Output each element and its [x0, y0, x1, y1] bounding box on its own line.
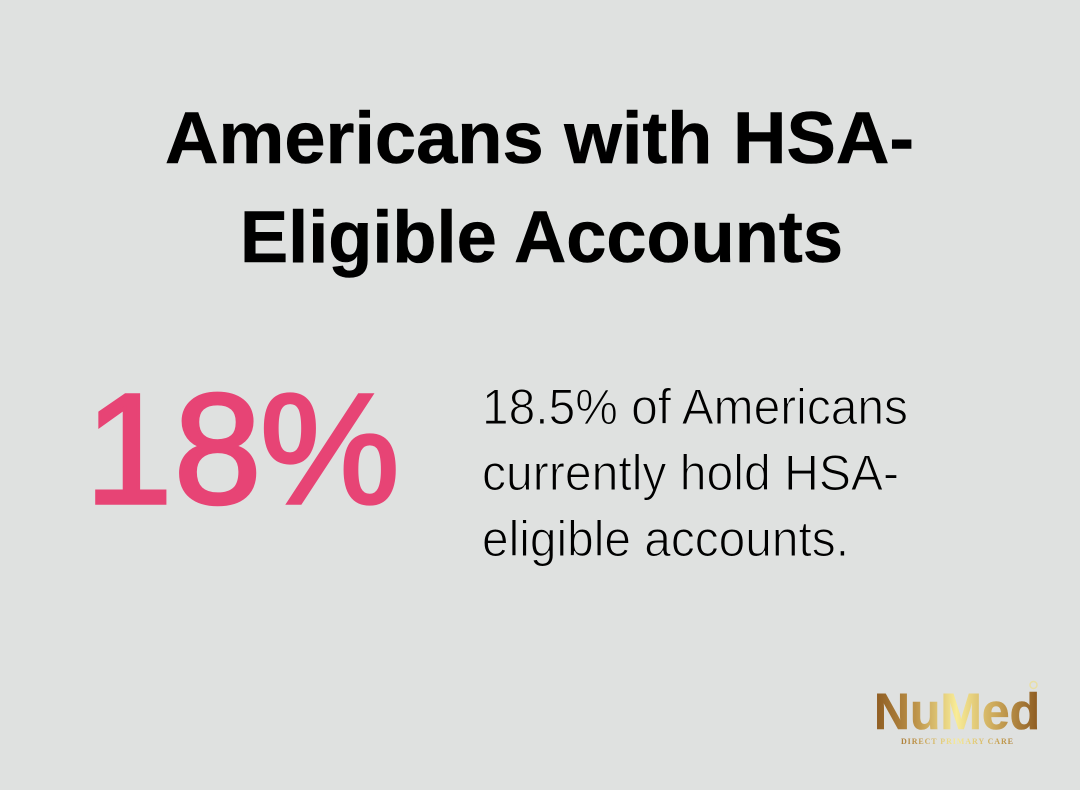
big stat: 18%: 18%	[85, 362, 400, 537]
logo wordmark: NuMed	[874, 683, 1040, 740]
logo: NuMed	[874, 682, 1040, 746]
stat description	[482, 379, 908, 567]
stat description: 18.5% of Americans	[482, 379, 908, 435]
title: Eligible Accounts	[240, 197, 843, 278]
title	[165, 98, 914, 278]
stat description: eligible accounts.	[482, 511, 849, 567]
logo tagline: DIRECT PRIMARY CARE	[901, 737, 1013, 746]
stat description: currently hold HSA-	[482, 445, 899, 501]
title: Americans with HSA-	[165, 98, 914, 179]
logo emblem	[1030, 682, 1037, 688]
